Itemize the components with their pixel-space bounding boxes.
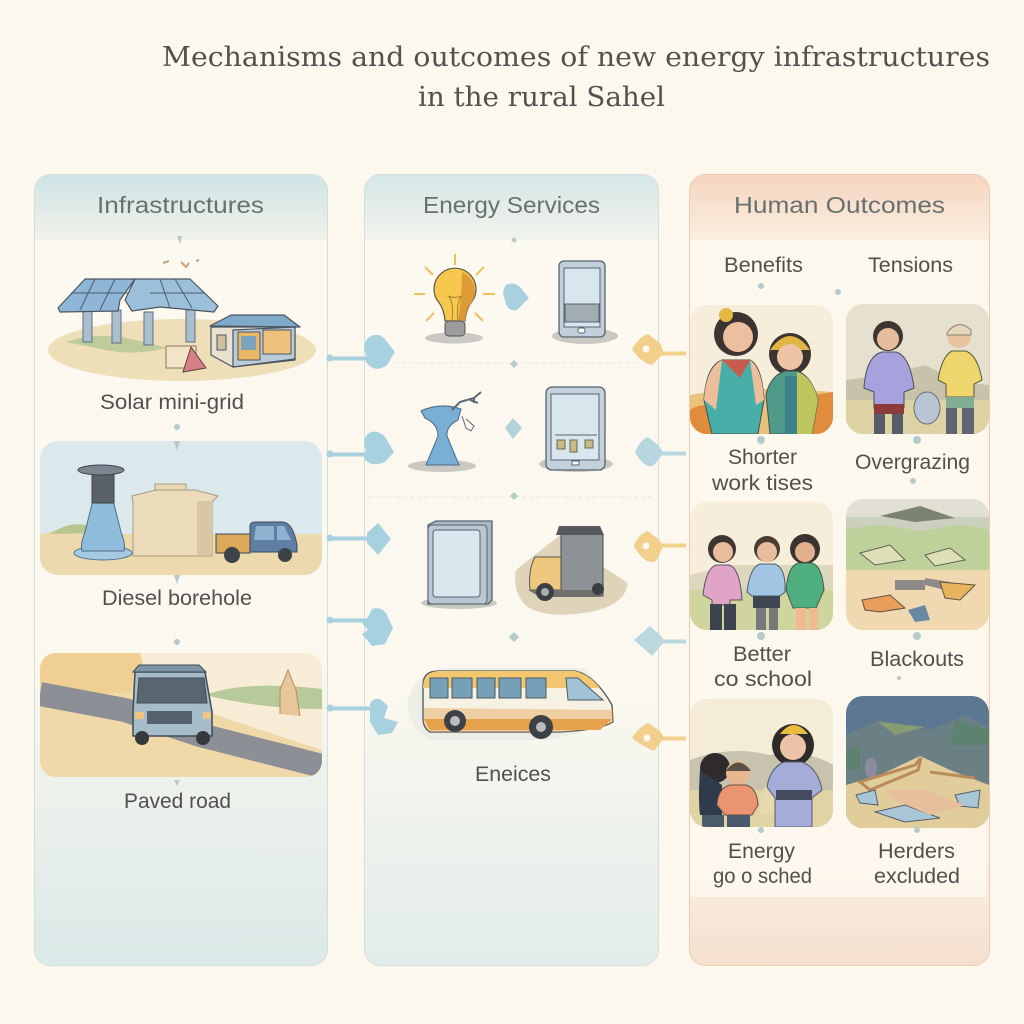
label: better go to school: Better (733, 643, 791, 666)
arrows: infrastructures to services (326, 335, 398, 735)
sub-heading: benefits: Benefits (724, 254, 803, 277)
icon: fridge (421, 521, 497, 609)
panel: infrastructures (34, 174, 328, 966)
flow markers (174, 236, 921, 833)
heading: energy services: Energy Services (423, 192, 600, 218)
label: shorter work times: Shorter (728, 446, 797, 469)
image: energy for school (690, 699, 833, 827)
panel: human outcomes (690, 174, 990, 966)
icon: bus (408, 668, 613, 740)
label: overgrazing: Overgrazing (855, 451, 970, 474)
heading: human outcomes: Human Outcomes (734, 192, 945, 218)
image: diesel borehole (40, 441, 322, 575)
icon: cart vehicle (515, 526, 628, 615)
connector: services diamond 2 (505, 418, 522, 439)
icon: phone (552, 261, 618, 344)
label: herders excluded: Herders (878, 840, 955, 863)
image: benefit three people (690, 502, 833, 630)
label: energy go to school: Energy (728, 840, 795, 863)
label: better go to school: co school (714, 668, 812, 691)
image: paved road (40, 653, 322, 777)
label: shorter work times: work tises (711, 472, 813, 495)
title: Mechanisms and outcomes of new energy infrastructures (162, 42, 990, 73)
image: benefit women (690, 305, 833, 434)
icon: water tap (408, 392, 481, 472)
label: energy go to school (713, 840, 812, 888)
label: better go to school (714, 643, 812, 691)
label: herders excluded (874, 840, 960, 888)
icon: solar mini-grid (48, 260, 316, 381)
heading: infrastructures: Infrastructures (97, 192, 264, 218)
arrows: services to outcomes (632, 334, 686, 751)
panel: energy services (364, 174, 658, 966)
image: tension two people (846, 304, 989, 434)
label: blackouts: Blackouts (870, 648, 964, 671)
title: in the rural Sahel (418, 82, 665, 113)
label: energy go to school: go o sched (713, 865, 812, 888)
label: solar mini-grid: Solar mini-grid (100, 391, 244, 414)
image: herders excluded (846, 696, 989, 828)
icon: light bulb (414, 254, 495, 344)
label: energy services output: Eneices (475, 763, 551, 786)
icon: tablet (539, 387, 613, 472)
connector: services blob 1 (503, 284, 529, 310)
label: shorter work times (711, 446, 813, 495)
label: diesel borehole: Diesel borehole (102, 587, 252, 610)
sub-heading: tensions: Tensions (868, 254, 953, 277)
label: paved road: Paved road (124, 790, 231, 813)
title (162, 42, 990, 113)
image: overgrazed land (846, 499, 989, 630)
label: herders excluded: excluded (874, 865, 960, 888)
